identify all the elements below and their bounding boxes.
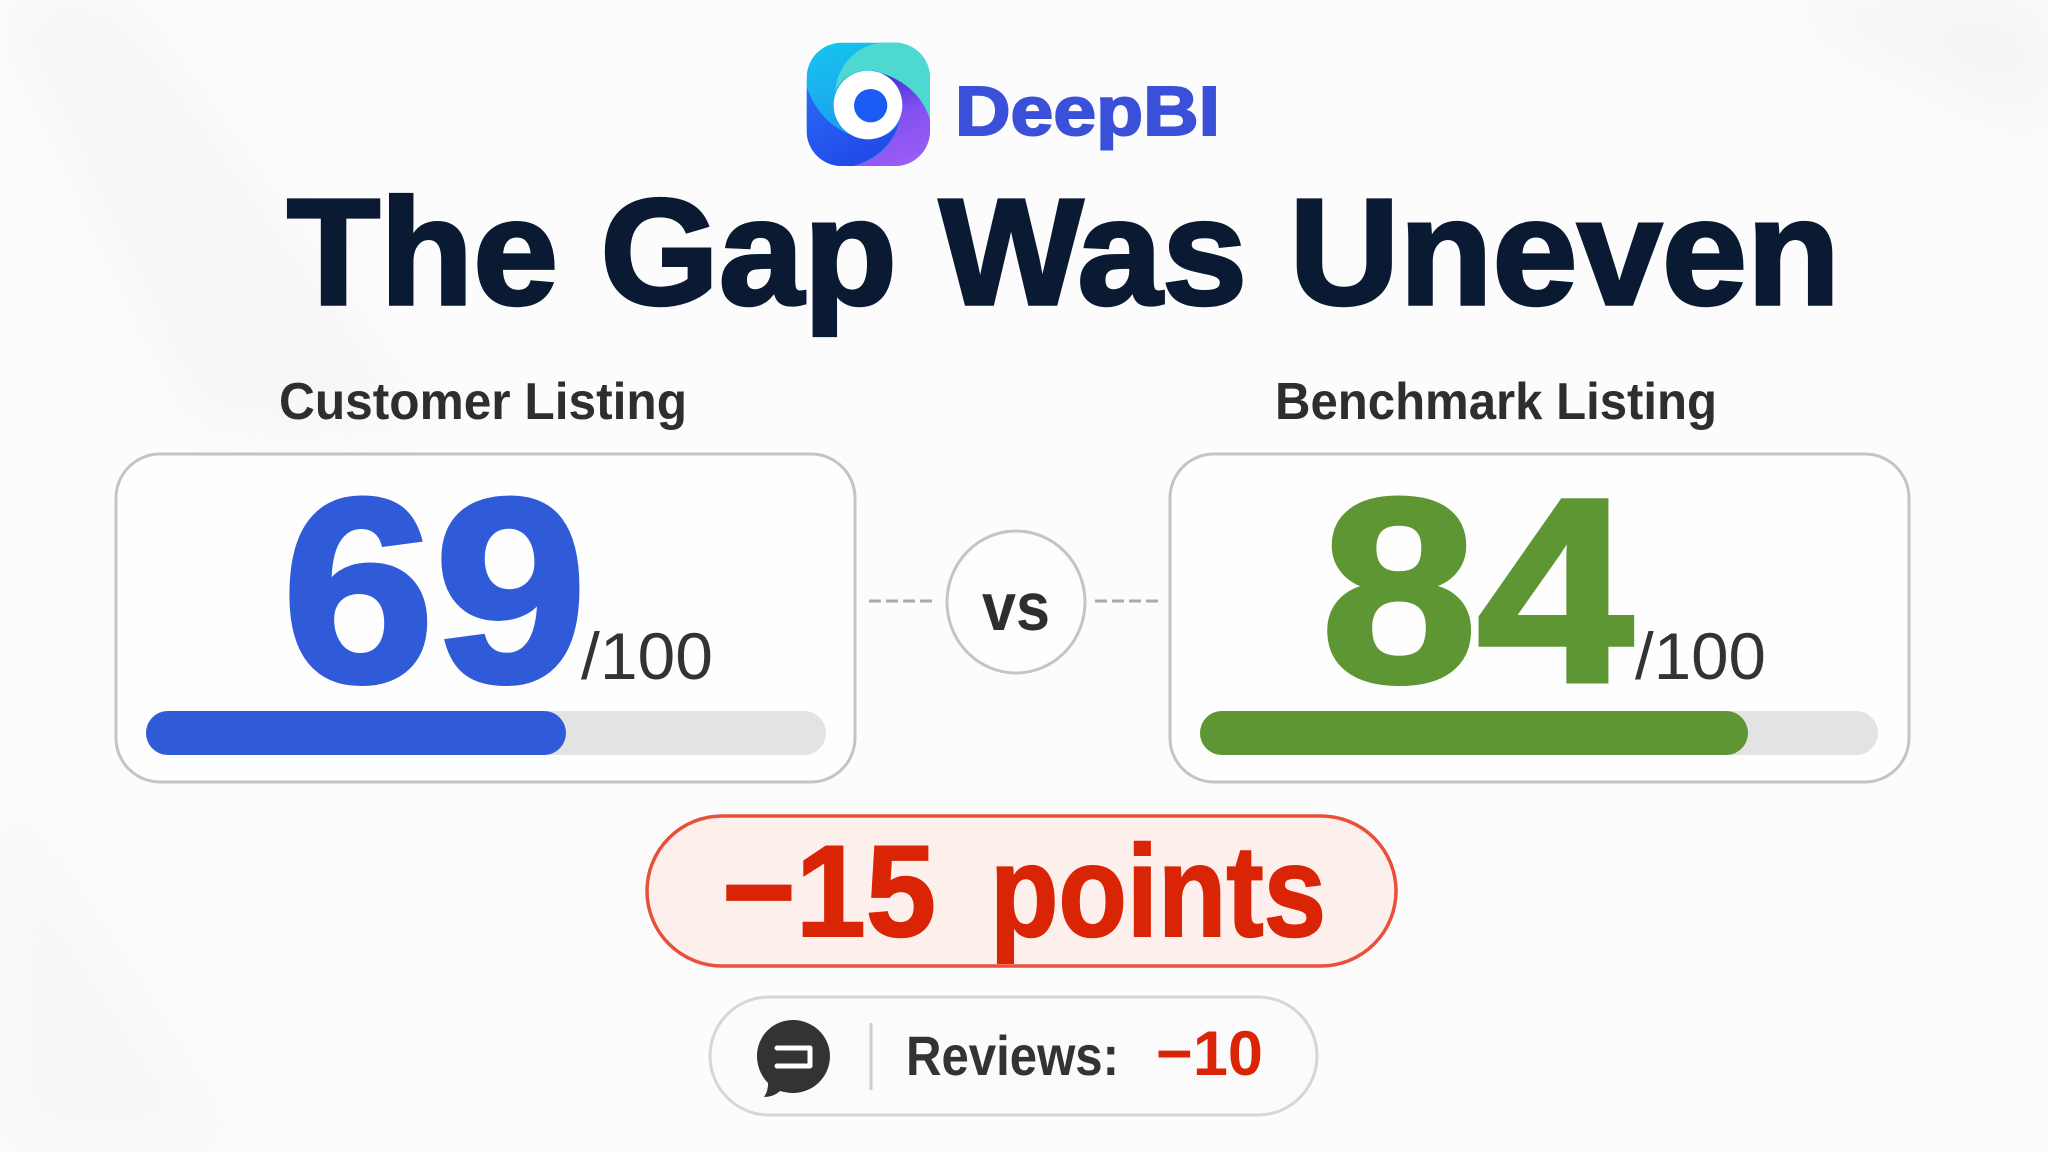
logo: DeepBI	[807, 43, 1220, 166]
reviews pill	[710, 997, 1317, 1115]
heading: Benchmark Listing: Benchmark Listing	[1275, 373, 1717, 431]
reviews label: Reviews:	[906, 1024, 1119, 1087]
panel: benchmark score	[1170, 444, 1909, 782]
progress bar	[146, 711, 826, 755]
callout: -15 points	[647, 816, 1396, 966]
progress bar	[1200, 711, 1878, 755]
callout: -15 points: −15	[722, 818, 936, 964]
brand name: DeepBI	[955, 72, 1220, 150]
score 84: 84	[1321, 444, 1635, 737]
callout: -15 points: points	[990, 818, 1326, 964]
icon: chat bubble	[757, 1020, 830, 1097]
reviews delta: −10	[1156, 1019, 1263, 1089]
icon: DeepBI swirl eye	[807, 43, 930, 166]
heading: Customer Listing: Customer Listing	[279, 373, 687, 431]
panel: customer score	[116, 444, 855, 782]
score scale: /100	[1635, 619, 1766, 693]
vs connector: vs	[982, 569, 1050, 645]
score scale: /100	[581, 619, 713, 693]
vs connector	[869, 531, 1163, 673]
score 69: 69	[282, 444, 587, 737]
title: The Gap Was Uneven	[287, 167, 1840, 336]
